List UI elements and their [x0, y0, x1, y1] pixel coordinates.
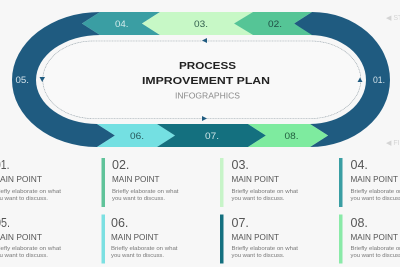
card 03: 03. [232, 158, 249, 172]
card 02: MAIN POINT [112, 175, 160, 184]
card 08: you want to discuss. [350, 253, 400, 259]
title: PROCESS [179, 60, 236, 72]
dotted process loop [43, 41, 361, 118]
card 02: you want to discuss. [112, 196, 165, 202]
arrow: left [40, 77, 45, 82]
card 06: you want to discuss. [111, 253, 164, 259]
card 07 [220, 214, 299, 264]
card 02: Briefly elaborate on what [112, 189, 179, 195]
card 05 [0, 216, 62, 259]
card 02: 02. [112, 158, 129, 172]
segment 07: 07. [205, 131, 219, 142]
arrow: right [358, 78, 362, 82]
card 08 [339, 214, 400, 264]
process racetrack diagram [12, 12, 390, 147]
card 06: MAIN POINT [111, 233, 159, 242]
card 06: 06. [111, 216, 128, 230]
segment 06: 06. [130, 131, 144, 142]
card 04: you want to discuss. [350, 196, 400, 202]
segment 05: left arc [12, 12, 115, 147]
segment 08 [248, 124, 328, 147]
segment 01: right arc [294, 12, 390, 147]
card 07: 07. [232, 216, 249, 230]
card 04: 04. [350, 158, 368, 172]
title: IMPROVEMENT PLAN [142, 75, 270, 87]
card 08: MAIN POINT [350, 233, 398, 242]
card 03: MAIN POINT [232, 175, 279, 184]
segment 03: 03. [194, 19, 208, 30]
card 07: Briefly elaborate on what [232, 246, 299, 252]
card 06: Briefly elaborate on what [111, 246, 178, 252]
segment 08: 08. [284, 131, 298, 142]
subtitle: INFOGRAPHICS [175, 92, 240, 100]
segment 03 [142, 12, 253, 35]
card 04: MAIN POINT [350, 175, 398, 184]
card 03: you want to discuss. [232, 196, 284, 202]
segment 01: right arc: 01. [373, 75, 385, 86]
segment 04 [82, 12, 160, 35]
segment 02: 02. [268, 19, 282, 30]
title [142, 60, 270, 87]
segment 07 [157, 124, 266, 147]
card 07: MAIN POINT [232, 233, 279, 242]
segment 02 [234, 12, 312, 35]
arrow: bottom loop [202, 116, 207, 121]
card 01 [0, 158, 62, 202]
card 03 [220, 158, 299, 207]
card 02 [102, 158, 179, 207]
arrow: top loop [202, 38, 207, 43]
card 08: 08. [350, 216, 368, 230]
card 06 [102, 214, 178, 264]
segment 05: left arc: 05. [16, 75, 29, 86]
card 04 [339, 158, 400, 207]
card 03: Briefly elaborate on what [232, 189, 299, 195]
segment 06 [97, 124, 175, 147]
segment 04: 04. [115, 19, 128, 30]
card 07: you want to discuss. [232, 253, 284, 259]
